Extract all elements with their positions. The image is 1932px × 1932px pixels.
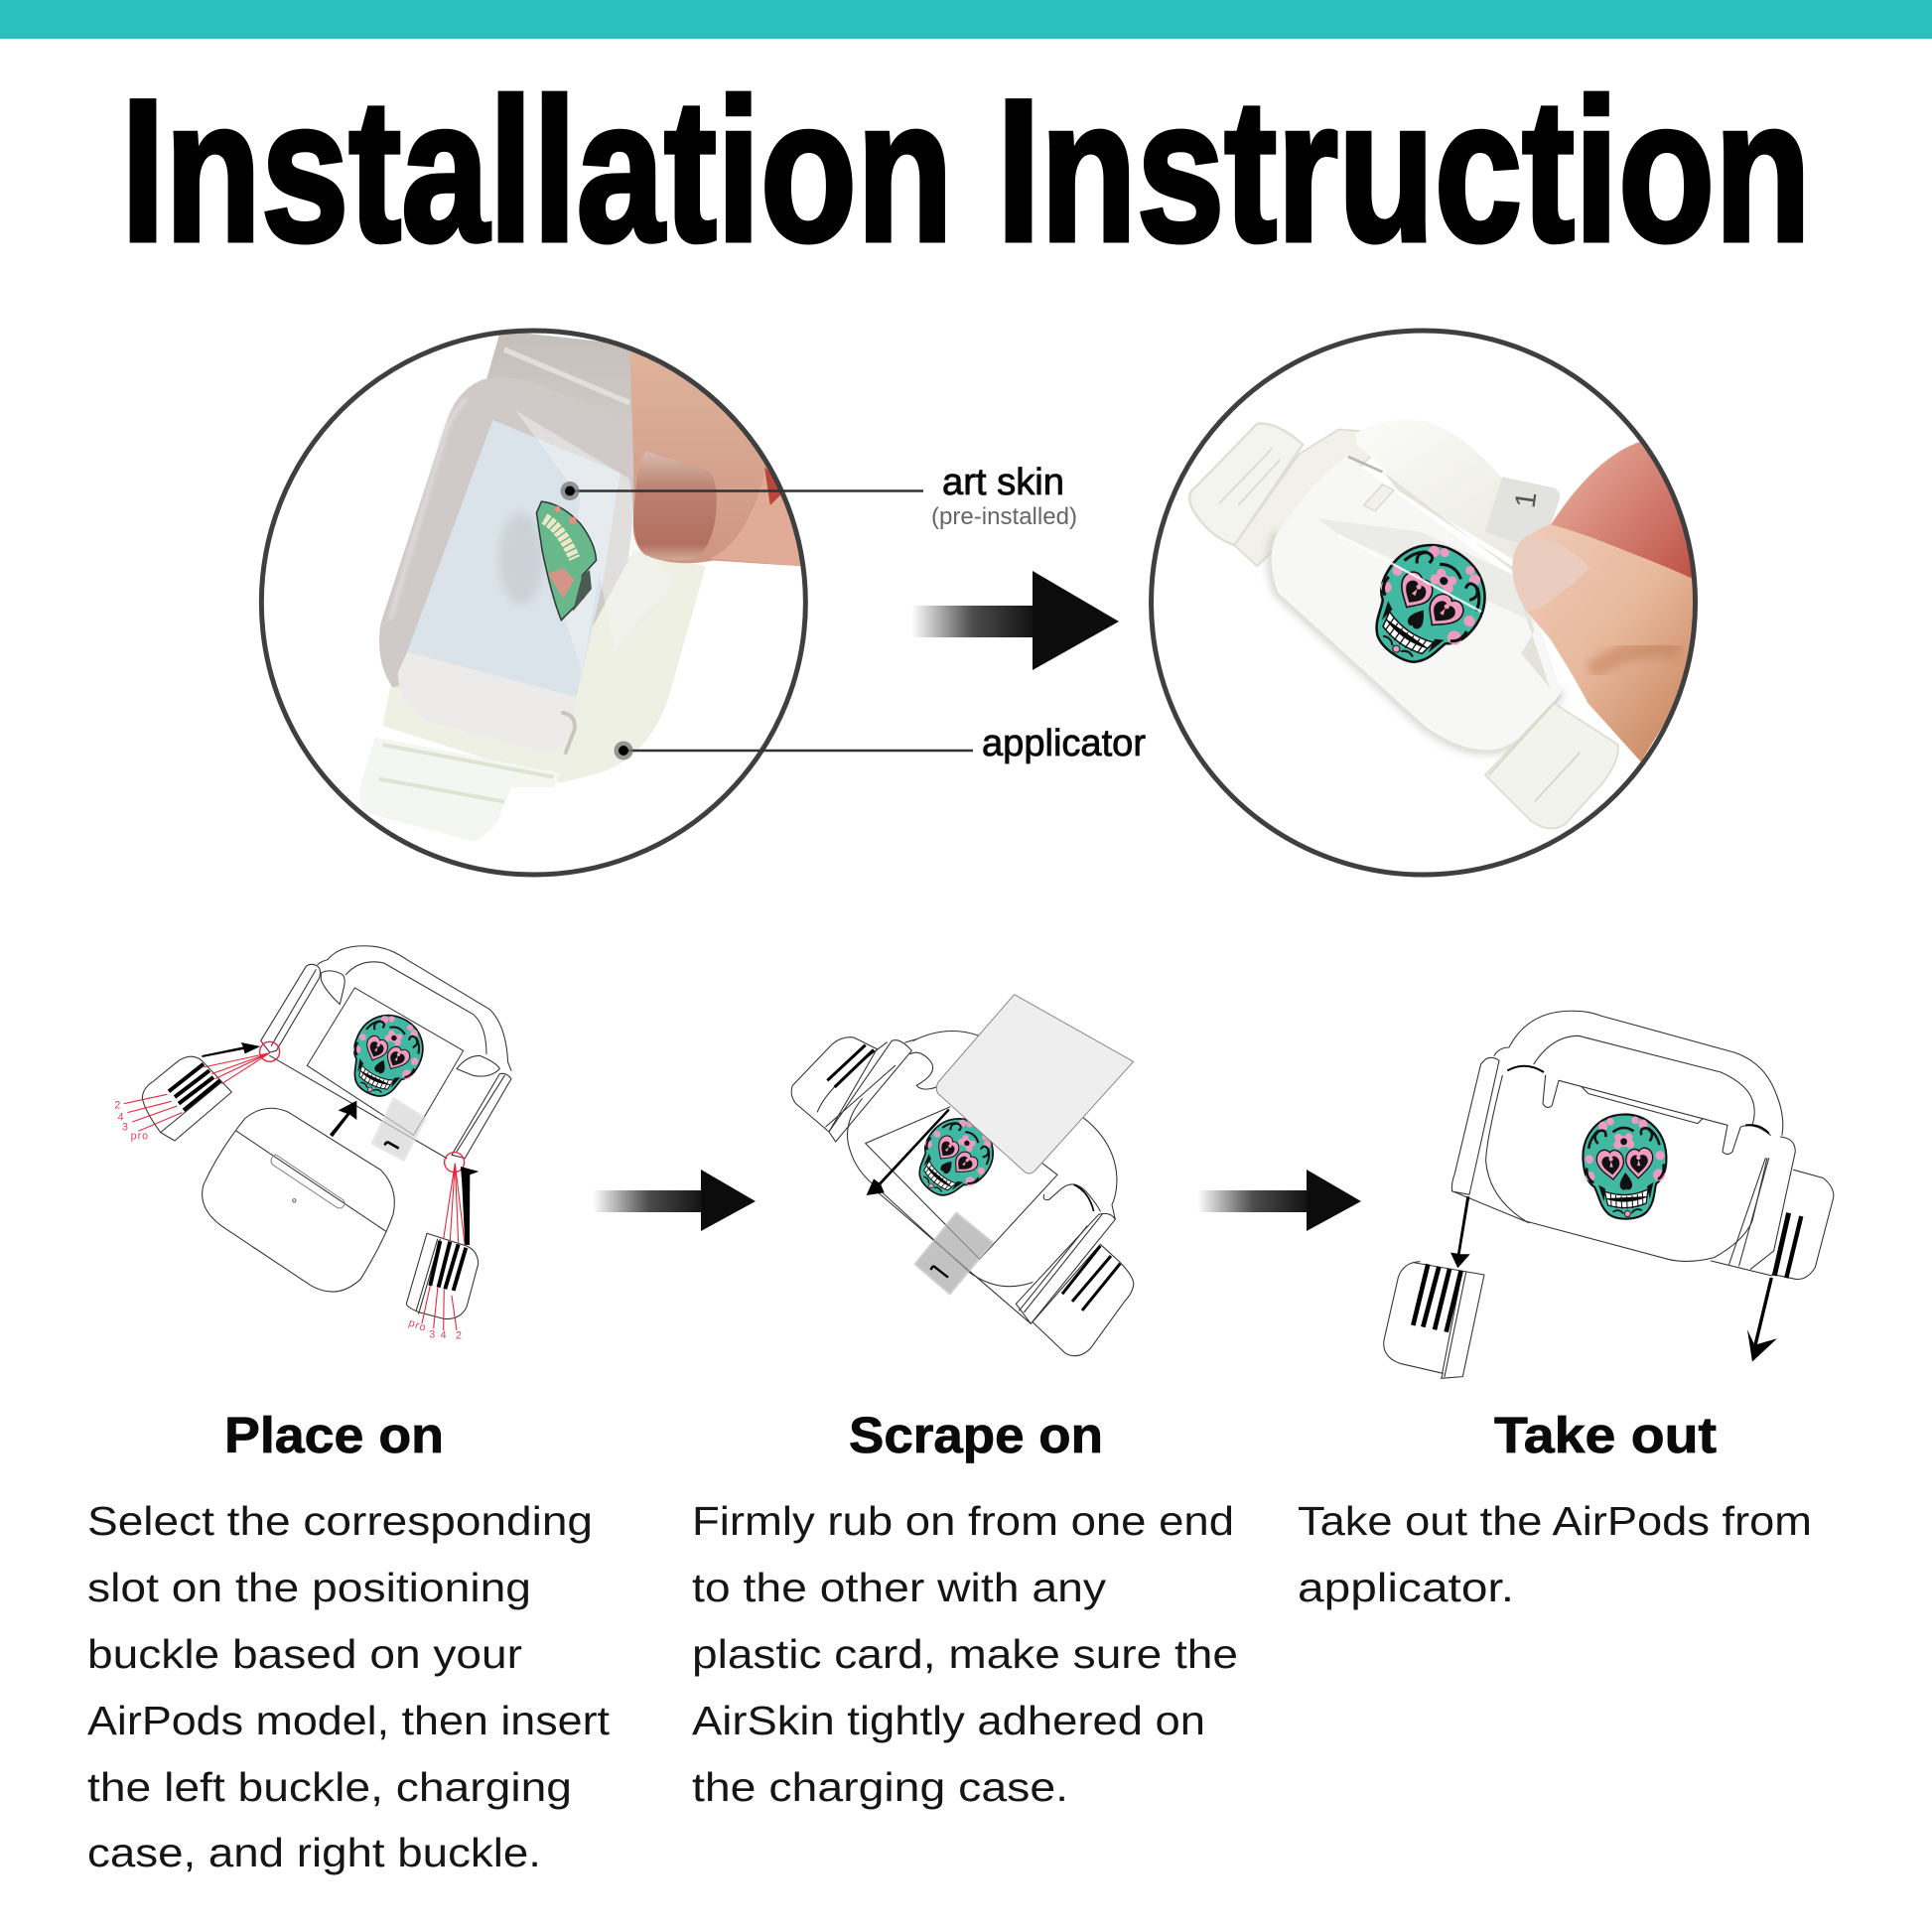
right buckle bars xyxy=(1774,1213,1789,1276)
scraping arrow xyxy=(867,1109,950,1195)
clip tab on case xyxy=(1363,484,1394,511)
shadow on case xyxy=(1383,472,1550,688)
right buckle: pro xyxy=(407,1317,428,1334)
skull sticker xyxy=(338,1005,434,1107)
finger behind xyxy=(1551,442,1692,578)
right buckle: 2 xyxy=(456,1330,462,1342)
dark fold between fingers xyxy=(710,468,800,566)
peeled skull sticker xyxy=(536,501,597,621)
text block: place on: the left buckle, charging xyxy=(87,1764,572,1810)
text block: place on xyxy=(87,1498,611,1875)
top teal band xyxy=(0,0,1932,39)
charging case xyxy=(203,1108,394,1292)
applicator frame xyxy=(261,946,511,1159)
thumb creases xyxy=(1591,648,1679,672)
applicator outline xyxy=(791,1032,1134,1356)
slot markers xyxy=(260,1041,465,1173)
arrow: right buckle out xyxy=(1747,1278,1777,1362)
right buckle xyxy=(406,1164,479,1342)
removed left buckle xyxy=(1384,1262,1484,1378)
thumb xyxy=(1512,524,1698,761)
arrow: case into frame xyxy=(330,1101,356,1137)
applicator outline xyxy=(1451,1011,1834,1279)
right buckle: 4 xyxy=(441,1329,447,1341)
left buckle: 4 xyxy=(118,1111,124,1123)
right buckle: 3 xyxy=(429,1328,435,1340)
text block: take out xyxy=(1298,1498,1812,1610)
left buckle: 3 xyxy=(122,1121,128,1133)
text block: place on: Select the corresponding xyxy=(87,1498,593,1544)
clear film band xyxy=(1318,518,1535,623)
backing paper xyxy=(407,420,621,697)
left buckle: 2 xyxy=(114,1099,120,1111)
label: applicator: applicator xyxy=(982,723,1146,764)
shadow below sticker xyxy=(498,513,544,605)
inner gap line xyxy=(1348,457,1383,472)
applicator ear highlight xyxy=(1507,1066,1769,1134)
text block: place on: AirPods model, then insert xyxy=(87,1698,611,1743)
arrow: right buckle xyxy=(461,1167,479,1245)
skull sticker xyxy=(1375,544,1486,663)
arrow: place on to scrape on xyxy=(593,1170,756,1231)
lower buckle xyxy=(359,737,561,842)
text block: scrape on: the charging case. xyxy=(692,1764,1068,1810)
gray pull tab xyxy=(372,1099,425,1160)
illustration: take out xyxy=(1384,1011,1834,1378)
left buckle: pro xyxy=(131,1131,149,1143)
arrow: left buckle xyxy=(202,1042,260,1057)
label: art skin: art skin xyxy=(942,462,1064,503)
text block: scrape on: to the other with any xyxy=(692,1565,1107,1610)
case highlight rim xyxy=(390,399,467,620)
cream applicator frame xyxy=(382,551,706,782)
numbered pull tab xyxy=(1485,477,1560,543)
text block: take out: Take out the AirPods from xyxy=(1298,1498,1812,1544)
heading: scrape on: Scrape on xyxy=(849,1407,1103,1463)
applicator arch xyxy=(1356,420,1519,558)
peeled clear film xyxy=(516,411,633,671)
fingernail xyxy=(633,452,717,560)
buckle slot bars xyxy=(827,1045,1120,1311)
skull sticker xyxy=(1581,1112,1670,1221)
buckle ridges xyxy=(1219,449,1280,505)
text block: scrape on: Firmly rub on from one end xyxy=(692,1498,1234,1544)
gray pull tab xyxy=(915,1213,993,1294)
leader line: applicator xyxy=(614,741,973,760)
illustration: place on xyxy=(114,946,511,1342)
charging case xyxy=(1272,456,1561,750)
lower buckle xyxy=(1485,703,1618,828)
buckle ridge xyxy=(1489,695,1581,802)
text block: scrape on: plastic card, make sure the xyxy=(692,1631,1238,1677)
connecting band xyxy=(1234,429,1375,566)
numbered pull tab: 1 xyxy=(1510,489,1543,510)
circle outline xyxy=(261,331,805,875)
arrow: left buckle out xyxy=(1450,1196,1470,1268)
left buckle xyxy=(114,1053,270,1143)
text block: scrape on xyxy=(692,1498,1238,1810)
finger holding the film xyxy=(629,345,808,570)
arrow: scrape on to take out xyxy=(1197,1170,1361,1231)
sticker sheet xyxy=(307,988,464,1135)
heading: take out: Take out xyxy=(1494,1407,1717,1463)
white case bottom xyxy=(397,651,477,686)
case shadow xyxy=(1272,532,1561,750)
text block: take out: applicator. xyxy=(1298,1565,1514,1610)
text block: place on: case, and right buckle. xyxy=(87,1830,541,1875)
plastic card xyxy=(936,995,1134,1173)
gap beside case xyxy=(561,713,575,755)
buckle ridge xyxy=(379,745,554,802)
heading: place on: Place on xyxy=(224,1407,444,1463)
photo circle: peeling backing off the applied skin xyxy=(1152,331,1698,875)
photo circle: applicator with pre-installed art skin xyxy=(261,331,808,875)
skull sticker xyxy=(902,1106,1006,1210)
arrow between photos xyxy=(911,571,1119,670)
label: pre-installed: (pre-installed) xyxy=(931,503,1077,530)
thumbnail xyxy=(1512,536,1589,612)
upper buckle xyxy=(1189,424,1303,545)
text block: scrape on: AirSkin tightly adhered on xyxy=(692,1698,1205,1743)
circle outline xyxy=(1152,331,1696,875)
charging case under applicator xyxy=(379,377,637,699)
film glare line xyxy=(1339,535,1481,612)
text block: place on: buckle based on your xyxy=(87,1631,522,1677)
second right buckle bar xyxy=(1786,1216,1801,1278)
illustration: scrape on xyxy=(791,995,1134,1356)
text block: place on: slot on the positioning xyxy=(87,1565,531,1610)
leader line: art skin xyxy=(560,482,923,500)
top strap of the applicator xyxy=(486,334,632,420)
